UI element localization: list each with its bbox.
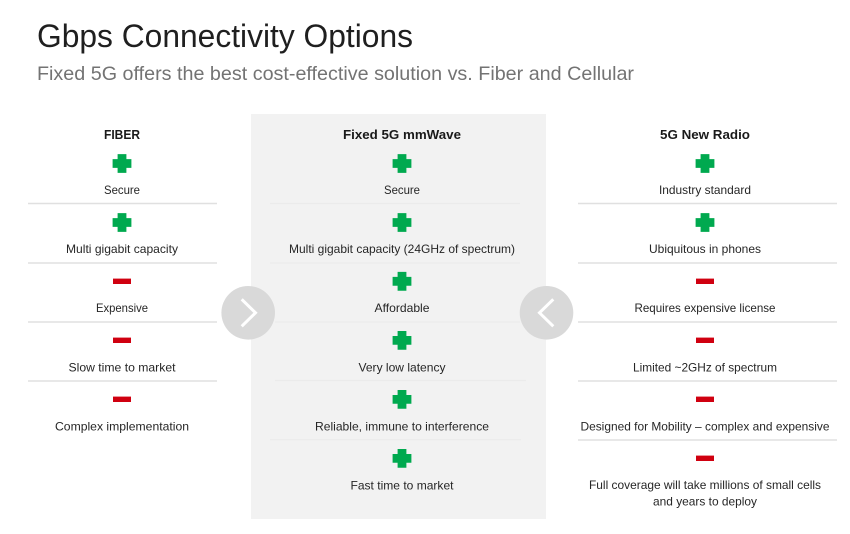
text: ubiquitous in phones: Ubiquitous in phones bbox=[649, 242, 761, 256]
column: 5G new radio bbox=[580, 127, 830, 508]
icon: plus bbox=[113, 213, 131, 232]
text: limited spectrum: Limited ~2GHz of spectrum bbox=[633, 360, 777, 374]
subtitle: Fixed 5G offers the best cost-effective solution vs. Fiber and Cellular bbox=[37, 63, 635, 85]
text: slow time to market: Slow time to market bbox=[68, 360, 176, 374]
icon: minus bbox=[696, 397, 714, 402]
text: multi gigabit capacity 24GHz: Multi gigabit capacity (24GHz of spectrum) bbox=[289, 242, 515, 256]
text: secure: Secure bbox=[104, 183, 140, 197]
column: fiber bbox=[55, 127, 189, 434]
heading: fiber: FIBER bbox=[104, 127, 141, 142]
text: expensive: Expensive bbox=[96, 301, 148, 315]
column: fixed 5G mmWave bbox=[289, 127, 515, 492]
text: secure: Secure bbox=[384, 183, 420, 197]
text: designed for mobility: Designed for Mobility – complex and expensive bbox=[580, 420, 830, 434]
heading: fixed 5G mmWave: Fixed 5G mmWave bbox=[343, 127, 461, 142]
icon: plus bbox=[393, 213, 411, 232]
icon: minus bbox=[113, 338, 131, 343]
icon: minus bbox=[696, 338, 714, 343]
text: affordable: Affordable bbox=[374, 301, 430, 315]
title: Gbps Connectivity Options bbox=[37, 18, 413, 54]
icon: minus bbox=[113, 279, 131, 284]
text: complex implementation: Complex implementation bbox=[55, 420, 189, 434]
icon: plus bbox=[393, 154, 411, 173]
icon: plus bbox=[696, 154, 714, 173]
text: fast time to market: Fast time to market bbox=[350, 478, 454, 492]
icon: minus bbox=[696, 456, 714, 461]
arrow: right chevron bbox=[221, 286, 275, 340]
icon: plus bbox=[393, 390, 411, 409]
icon: minus bbox=[696, 279, 714, 284]
icon: plus bbox=[696, 213, 714, 232]
text: requires expensive license: Requires expensive license bbox=[634, 301, 776, 315]
text: reliable: Reliable, immune to interference bbox=[315, 420, 489, 434]
text: full coverage bbox=[589, 478, 821, 508]
icon: minus bbox=[113, 397, 131, 402]
icon: plus bbox=[393, 331, 411, 350]
text: industry standard: Industry standard bbox=[659, 183, 751, 197]
heading: 5G new radio: 5G New Radio bbox=[660, 127, 750, 142]
text: multi gigabit capacity: Multi gigabit capacity bbox=[66, 242, 178, 256]
arrow: left chevron bbox=[520, 286, 573, 340]
icon: plus bbox=[113, 154, 131, 173]
icon: plus bbox=[393, 449, 411, 468]
icon: plus bbox=[393, 272, 411, 291]
panel: fixed 5G background bbox=[251, 114, 546, 519]
text: very low latency: Very low latency bbox=[358, 360, 446, 374]
text: full coverage: Full coverage will take millions of small cells bbox=[589, 478, 821, 492]
text: full coverage: and years to deploy bbox=[653, 494, 757, 508]
